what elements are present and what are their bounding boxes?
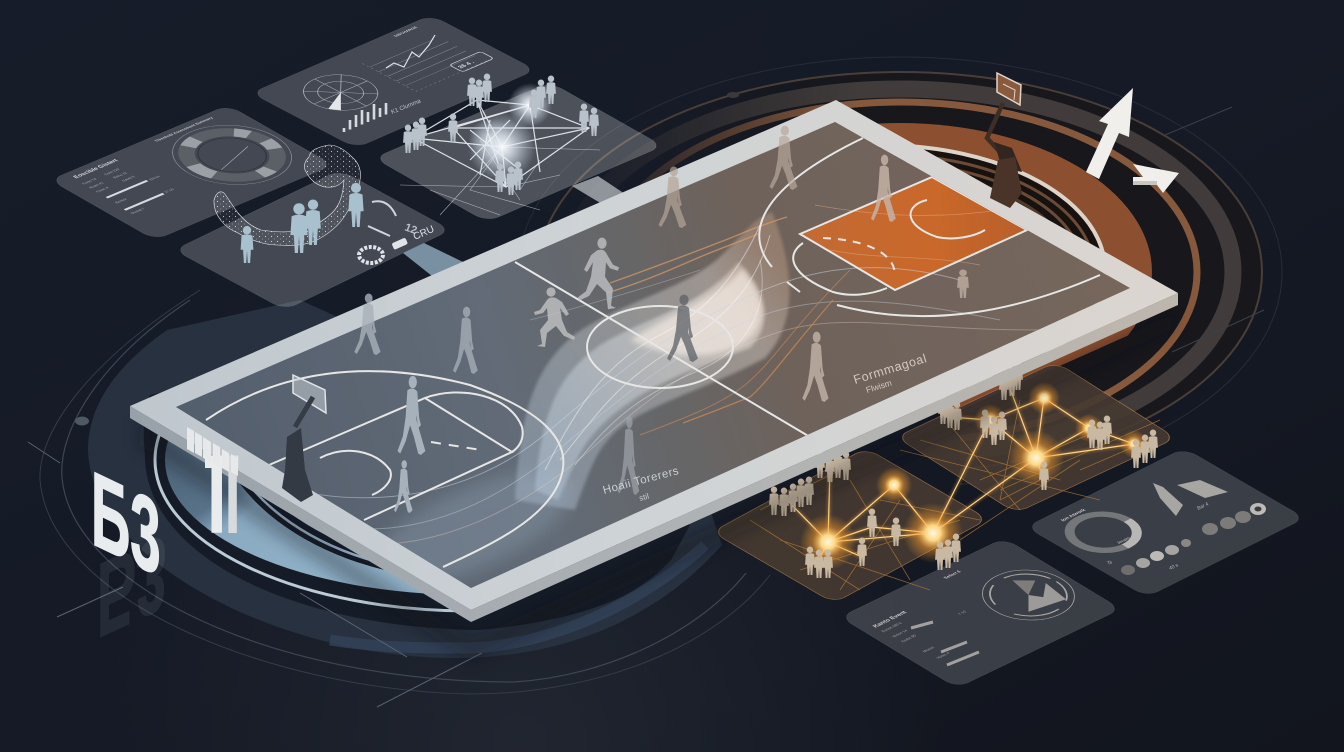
court label: right: Formmagoal [852,351,929,387]
row labels: 17 10 [163,188,175,194]
orange network lines [750,362,1160,590]
panel: lower orange network [712,448,988,603]
radar chart [288,67,393,118]
small data labels: Ts [1106,559,1114,567]
concentric rings: left blue [28,290,770,708]
row labels: Bonsor [114,197,129,204]
T stem: T [194,432,239,558]
court shadow [140,310,1180,660]
arrow: small right [1133,164,1179,193]
small data labels: Bar 4 [1196,501,1210,512]
hoop right [987,73,1022,208]
radial gauge [964,560,1093,630]
player groups [403,74,599,195]
court floor [176,122,1130,588]
orange key [800,177,1027,290]
panel: mesh figures, lower left of group: CRU [412,224,436,243]
hoop left [282,375,326,502]
panel: gauges dashboard [1026,448,1305,597]
panel: charts, upper centre [251,15,536,148]
small label: K1 Clumma [391,98,422,116]
row labels [881,599,998,662]
stat circles row [1121,539,1191,575]
comb stripes [187,427,238,476]
row labels [79,161,187,215]
court lines [206,138,1100,567]
row labels: 110 kn [148,175,161,181]
court label: left: Hoaii Torerers [602,465,680,497]
row labels: Gavto 8 [121,175,136,182]
panel title: Eoscible Gistert [73,159,120,179]
angular chart [1153,480,1228,516]
panel: upper orange network [896,362,1176,513]
panel title: Kanto Event [872,611,909,629]
stat box text: 26 4 . [457,61,477,69]
court label: left: stil [638,492,650,503]
row labels: Folm 120 [103,168,121,176]
donut chart [148,113,316,197]
basketball court platform [130,100,1178,622]
row labels: Moosit [922,646,936,653]
I stem: I [224,431,241,557]
platform lip [130,293,1178,622]
concentric rings: right orange [518,57,1282,487]
row labels: Hotec 4 [936,652,951,659]
large lettering reflection: Б3 [97,511,167,659]
panel heading: Threshold Assessment Summary [153,116,215,142]
panel: mesh figures, lower left of group [174,145,451,310]
energy flow [230,205,1040,611]
row labels: Dureat 7 [130,207,146,215]
gauge caption: Ion Atwork [1060,508,1088,523]
bright connections [787,383,1134,560]
donut gauge [1056,507,1151,558]
stat box [449,51,494,72]
glow nodes [800,382,1148,570]
panel: event dashboard [840,538,1121,688]
glowing nodes [468,83,552,181]
network lines [400,100,600,215]
panel: network white, upper right [374,74,663,222]
standing figures [241,183,364,263]
row labels: Bsinu 12 [112,172,129,179]
court frame [130,100,1178,610]
connector bars between panels and court [403,176,625,276]
progress bars [104,180,168,211]
bar chart [344,103,386,132]
row labels: Vetion 14 [891,629,909,638]
bars [911,622,979,665]
large lettering: TI [187,427,238,533]
chart heading: DISCHARGE [392,26,419,37]
court label: right: Flwism [865,378,893,395]
icon labels: 12 [403,222,419,237]
mesh swirl [214,145,361,245]
row labels: Sodut 90 [900,634,917,643]
small data labels: 40 s [1168,562,1180,572]
row labels: Forec 4 [95,186,110,193]
grid lines [362,32,487,91]
gauge value: Jeopts [1115,536,1132,545]
players [354,126,969,513]
row labels: Foxto 7d [81,178,98,185]
row labels: 7 10 [957,610,967,616]
small glyph icons [359,201,408,263]
line chart [386,35,435,68]
gauge caption: Sefect 6 [942,569,962,580]
large lettering: B3: Б3 [91,449,161,600]
arrow: large up [1086,88,1133,179]
panel: score dashboard, upper left [50,105,333,240]
ring node [727,92,739,98]
stat rings row [1202,503,1266,535]
small data labels [1106,501,1210,572]
bright connections glow [787,383,1134,560]
row labels: Ruaci 41 [88,182,105,189]
people groups [769,362,1158,578]
row labels: Eonsit 180 5 [881,622,903,633]
